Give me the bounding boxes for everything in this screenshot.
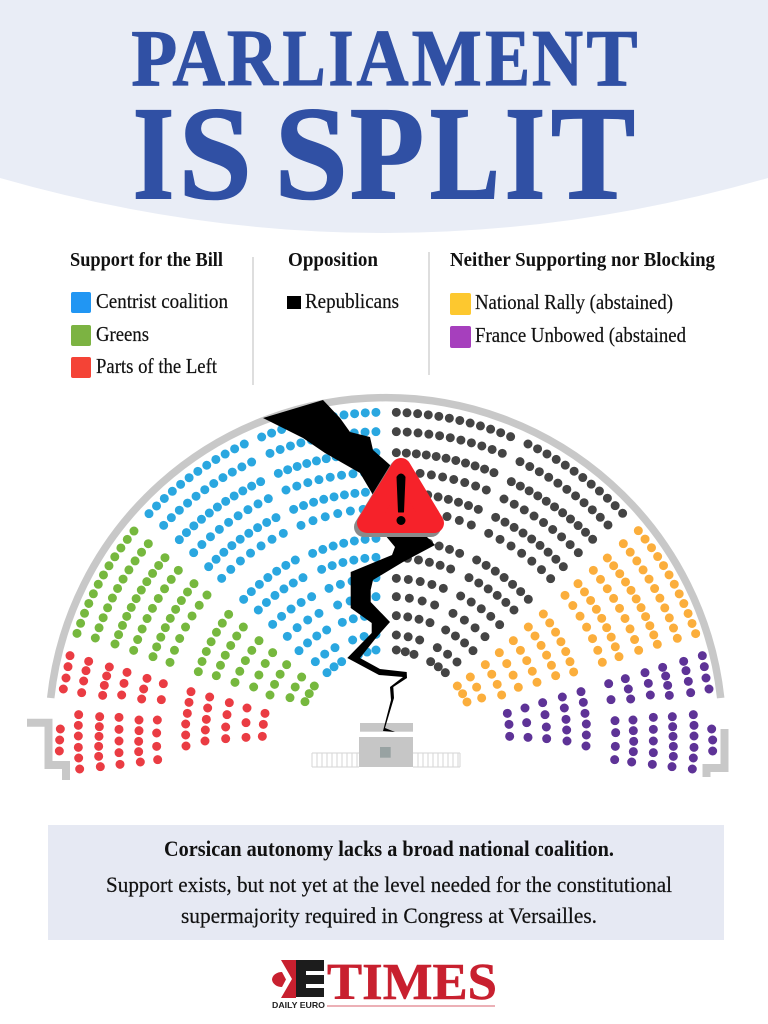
legend group: support for the bill: Centrist coalition <box>96 289 228 313</box>
title: P <box>131 15 177 103</box>
summary callout: Corsican autonomy lacks a broad national coalition. <box>164 836 614 861</box>
summary callout: supermajority required in Congress at Versailles. <box>181 903 597 928</box>
legend group: neither supporting nor blocking <box>450 249 716 348</box>
seats: parts of the left (red) <box>59 656 265 769</box>
title: N <box>532 15 583 103</box>
title: T <box>551 79 635 227</box>
legend group: opposition: Republicans <box>305 289 399 313</box>
title: I <box>133 79 174 227</box>
logo: Daily Euro Times: DAILY EURO <box>272 1000 325 1010</box>
seats: centrist coalition (blue) <box>149 412 376 673</box>
title: L <box>430 79 500 227</box>
icon: warning triangle <box>364 468 434 527</box>
podium <box>312 723 460 767</box>
seats: national rally (orange) <box>457 531 696 702</box>
title: A <box>172 15 225 103</box>
legend group: neither supporting nor blocking: France Unbowed (abstained <box>475 323 686 347</box>
title: I <box>505 79 545 227</box>
title: T <box>586 15 638 103</box>
legend <box>70 249 716 378</box>
title: A <box>356 15 409 103</box>
seats: greens <box>77 531 314 702</box>
summary callout: Support exists, but not yet at the level needed for the constitutional <box>106 872 672 897</box>
title <box>131 15 638 227</box>
legend group: opposition: Opposition <box>288 249 379 271</box>
hemicycle seating chart <box>27 398 724 780</box>
title: L <box>282 15 325 103</box>
title: M <box>412 15 482 103</box>
legend group: support for the bill: Parts of the Left <box>96 354 217 378</box>
left side bracket <box>27 723 66 780</box>
right half seats <box>396 412 713 769</box>
title: I <box>328 15 354 103</box>
legend group: opposition <box>287 249 399 313</box>
seats: republicans (dark grey) <box>396 412 623 673</box>
legend group: neither supporting nor blocking: National Rally (abstained) <box>475 290 673 314</box>
right side bracket <box>706 729 724 777</box>
crack through the chamber <box>263 400 435 732</box>
left half seats <box>59 412 376 769</box>
title: P <box>350 79 424 227</box>
header background <box>0 0 768 233</box>
legend group: support for the bill: Support for the Bill <box>70 249 223 271</box>
legend group: neither supporting nor blocking: Neither Supporting nor Blocking <box>450 249 716 271</box>
legend group: support for the bill: Greens <box>96 322 149 346</box>
logo: Daily Euro Times: TIMES <box>327 954 497 1011</box>
legend group: support for the bill <box>70 249 228 378</box>
seats: france unbowed (purple) <box>507 656 713 769</box>
title: E <box>485 15 530 103</box>
summary callout <box>48 825 724 940</box>
title: S <box>179 79 252 227</box>
title: R <box>227 15 279 103</box>
title: S <box>275 79 348 227</box>
chamber outline arc <box>51 398 721 698</box>
